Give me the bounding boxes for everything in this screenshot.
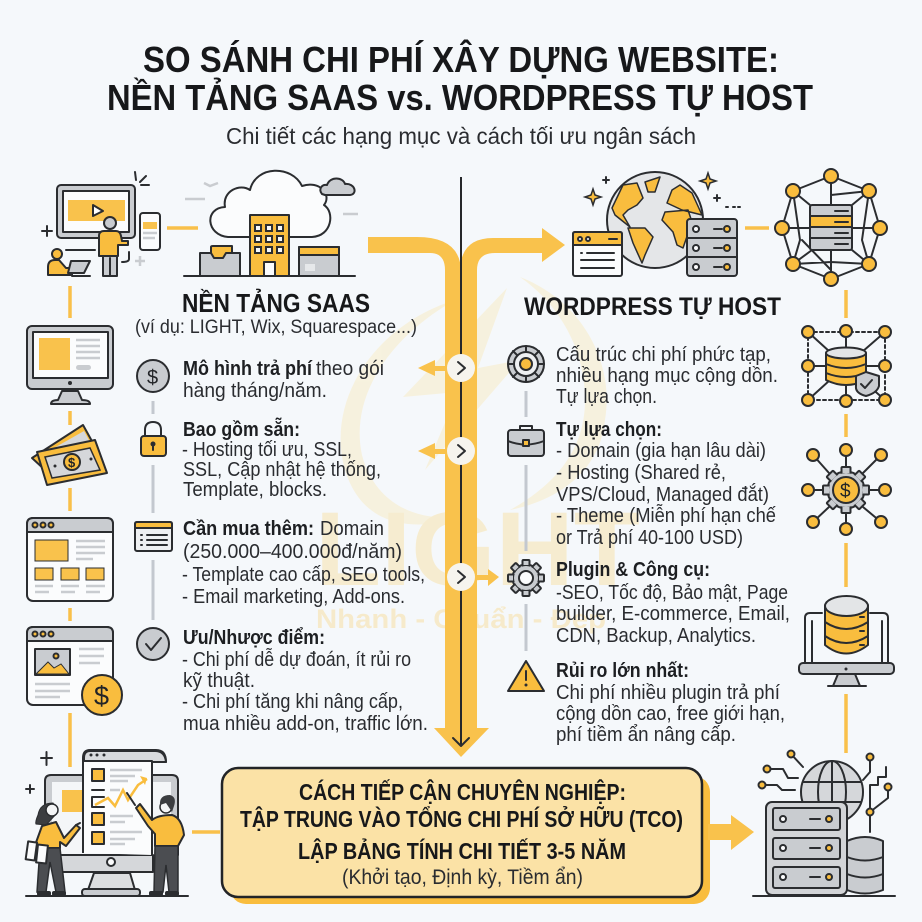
- icon: dollar coin: [137, 360, 169, 392]
- icon: presenter with monitor: [42, 172, 160, 276]
- callout: professional approach: [222, 768, 710, 904]
- heading: SaaS: [135, 288, 417, 338]
- item: subscription model: Mô hình trả phí: [183, 358, 313, 380]
- item: biggest risk: phí tiềm ẩn nâng cấp.: [556, 724, 736, 746]
- heading: SaaS: NỀN TẢNG SAAS: [182, 288, 370, 318]
- central divider line: [453, 177, 469, 746]
- item: need to buy: Domain: [320, 518, 384, 540]
- icon: cloud and building: [184, 171, 358, 276]
- icon: briefcase: [508, 426, 544, 456]
- icon: padlock: [141, 422, 166, 456]
- item: plugins and tools: Plugin & Công cụ:: [556, 559, 710, 581]
- item: plugins and tools: builder, E-commerce, Email,: [556, 603, 790, 625]
- right connectors: [745, 228, 846, 753]
- item: plugins and tools: -SEO, Tốc độ, Bảo mật, Page: [556, 582, 788, 604]
- heading: WordPress: WORDPRESS TỰ HOST: [524, 293, 781, 321]
- watermark logo: Nhanh - Chuẩn - Đẹp: [316, 604, 606, 634]
- item: self select: - Theme (Miễn phí hạn chế: [556, 504, 776, 527]
- branch arrows and chevron buttons: [418, 354, 499, 591]
- item: subscription model: [137, 358, 384, 402]
- callout: professional approach: LẬP BẢNG TÍNH CHI TIẾT 3-5 NĂM: [298, 836, 626, 864]
- item: self select: - Hosting (Shared rẻ,: [556, 462, 726, 484]
- item: included: SSL, Cập nhật hệ thống,: [183, 459, 381, 481]
- watermark logo: LIGHT: [315, 491, 640, 608]
- callout: professional approach: CÁCH TIẾP CẬN CHUYÊN NGHIỆP:: [299, 778, 626, 805]
- icon: web page with price: [27, 627, 122, 715]
- item: need to buy: - Email marketing, Add-ons.: [182, 586, 405, 608]
- icon: database network with shield: [802, 325, 891, 407]
- heading: SaaS: (ví dụ: LIGHT, Wix, Squarespace...): [135, 317, 417, 338]
- item: self select: [508, 419, 776, 549]
- item: biggest risk: Chi phí nhiều plugin trả phí: [556, 682, 780, 704]
- title: SO SÁNH CHI PHÍ XÂY DỰNG WEBSITE:: [143, 38, 779, 80]
- callout: professional approach: (Khởi tạo, Định kỳ, Tiềm ẩn): [342, 866, 583, 889]
- icon: stack of money: [32, 425, 107, 485]
- arrow: callout to server: [708, 815, 754, 850]
- central yellow arrows: [368, 228, 565, 757]
- icon: globe with window and server: [573, 172, 740, 276]
- item: cost structure: Cấu trúc chi phí phức tạp,: [556, 344, 771, 366]
- icon: dollar coin: $: [147, 367, 158, 389]
- item: self select: - Domain (gia hạn lâu dài): [556, 440, 766, 462]
- icon: laptop with database: [799, 596, 894, 686]
- item: cost structure: Tự lựa chọn.: [556, 386, 657, 408]
- item: need to buy: (250.000–400.000đ/năm): [183, 541, 402, 563]
- item: included: - Hosting tối ưu, SSL,: [182, 439, 352, 461]
- icon: gear with dollar network: $: [840, 481, 851, 502]
- item: self select: Tự lựa chọn:: [556, 419, 662, 441]
- subtitle: Chi tiết các hạng mục và cách tối ưu ngân sách: [226, 123, 696, 149]
- icon: template window: [27, 518, 113, 601]
- item: included: [141, 417, 381, 501]
- item: need to buy: Cần mua thêm:: [183, 518, 314, 540]
- icon: server network: [775, 169, 887, 286]
- item: biggest risk: Rủi ro lớn nhất:: [556, 660, 689, 682]
- item: plugins and tools: [508, 559, 790, 647]
- item: cost structure: nhiều hạng mục cộng dồn.: [556, 365, 778, 387]
- item: included: Bao gồm sẵn:: [183, 417, 300, 441]
- icon: server with globe and database: [753, 750, 895, 896]
- icon: stack of money: $: [68, 455, 76, 470]
- item: biggest risk: cộng dồn cao, free giới hạn,: [556, 703, 785, 725]
- item: included: Template, blocks.: [183, 479, 327, 501]
- icon: monitor with content: [27, 326, 113, 404]
- icon: list window: [135, 522, 172, 551]
- item: pros and cons: [137, 627, 428, 735]
- icon: check circle: [137, 628, 169, 660]
- item: pros and cons: kỹ thuật.: [183, 670, 255, 692]
- watermark logo: [315, 277, 640, 634]
- icon: target wheel: [508, 346, 544, 382]
- icon: gear: [508, 560, 544, 596]
- icon: gear with dollar network: [802, 444, 891, 535]
- title: NỀN TẢNG SAAS vs. WORDPRESS TỰ HOST: [107, 77, 813, 118]
- item: plugins and tools: CDN, Backup, Analytics.: [556, 625, 756, 647]
- icon: web page with price: $: [94, 681, 109, 711]
- icon: team reviewing dashboard: [26, 750, 188, 896]
- item: pros and cons: mua nhiều add-on, traffic lớn.: [183, 713, 428, 735]
- item: need to buy: - Template cao cấp, SEO tools,: [182, 564, 425, 586]
- icon: warning triangle: [508, 661, 544, 691]
- item: biggest risk: [508, 660, 785, 746]
- item: self select: or Trả phí 40-100 USD): [556, 527, 743, 549]
- callout: professional approach: TẬP TRUNG VÀO TỔNG CHI PHÍ SỞ HỮU (TCO): [240, 804, 683, 832]
- item: need to buy: [135, 518, 425, 608]
- person left: [36, 803, 58, 825]
- title: [107, 38, 813, 118]
- item: subscription model: theo gói: [316, 358, 384, 380]
- left connectors: [70, 228, 220, 832]
- item: pros and cons: Ưu/Nhược điểm:: [183, 627, 325, 649]
- item: subscription model: hàng tháng/năm.: [183, 380, 327, 402]
- person right: [160, 801, 172, 813]
- right item dividers: [524, 391, 528, 651]
- item: pros and cons: - Chi phí dễ dự đoán, ít rủi ro: [182, 648, 411, 671]
- item: cost structure: [508, 344, 778, 408]
- item: self select: VPS/Cloud, Managed đắt): [556, 483, 769, 506]
- item: pros and cons: - Chi phí tăng khi nâng cấp,: [182, 691, 403, 713]
- left item dividers: [152, 401, 154, 620]
